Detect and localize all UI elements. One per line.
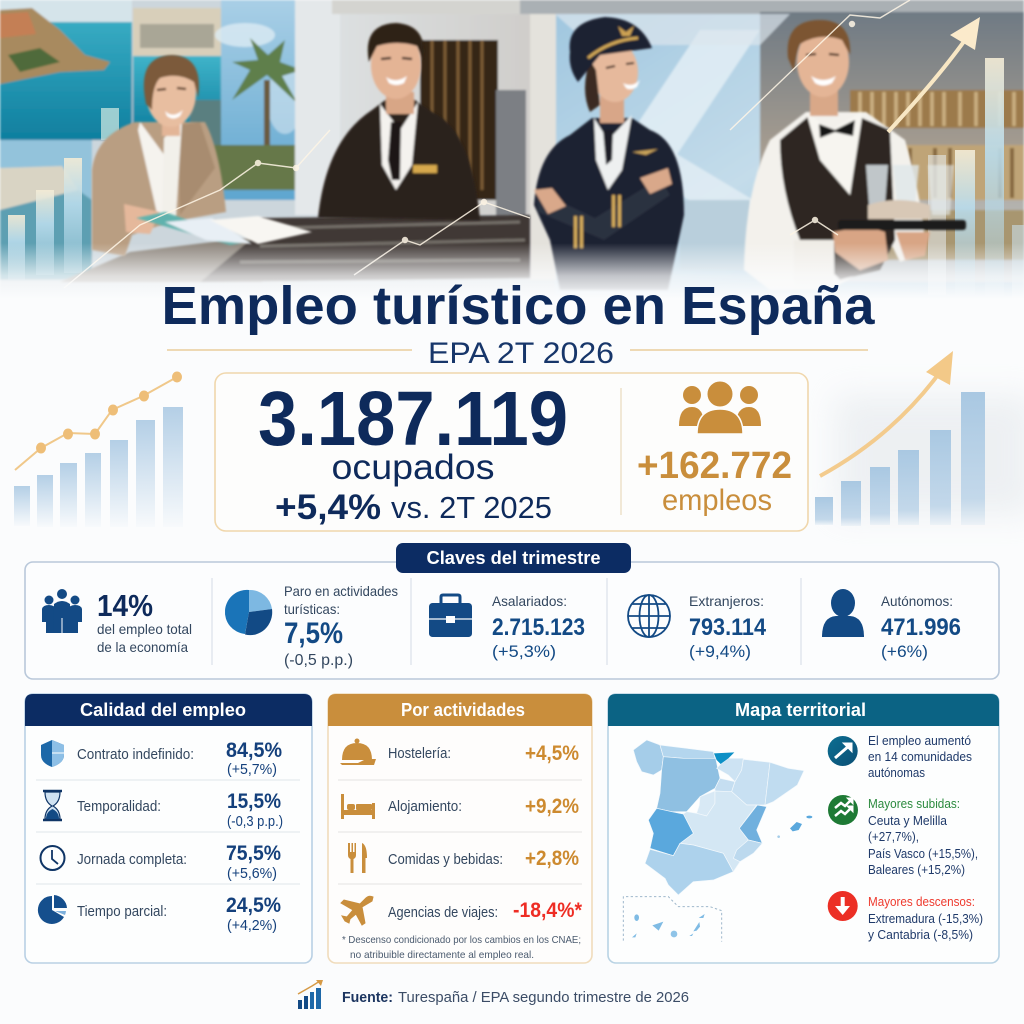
- row: hosteleria: Hostelería:: [388, 745, 451, 762]
- row: hosteleria: [340, 738, 579, 765]
- hero counter desk: [60, 215, 530, 282]
- hero photo collage: tourism workers: [0, 0, 1024, 309]
- kpi: self-employed: (+6%): [881, 642, 928, 661]
- growth arrow in hero: [888, 17, 980, 132]
- face features: [806, 54, 839, 55]
- panel: mapa territorial: [608, 694, 999, 963]
- footer source: Fuente:: [342, 989, 393, 1006]
- kpi: share of economy: 14%: [97, 588, 153, 623]
- kpi: foreigners: [628, 593, 767, 661]
- panel header: Por actividades: [401, 700, 525, 720]
- row: jornada completa: (+5,6%): [227, 865, 277, 882]
- panel: claves del trimestre: [25, 543, 999, 679]
- kpi: foreigners: (+9,4%): [689, 642, 751, 661]
- hero line chart overlay: [64, 0, 910, 288]
- row: contrato indefinido: [41, 739, 282, 778]
- row: tiempo parcial: Tiempo parcial:: [77, 903, 167, 920]
- face features: [157, 88, 186, 90]
- row: comidas y bebidas: +2,8%: [525, 847, 579, 870]
- kpi: employees: 2.715.123: [492, 614, 585, 641]
- kpi: unemployment: turísticas:: [284, 601, 340, 617]
- note: rises in 14 communities: autónomas: [868, 765, 925, 780]
- note: largest rises: País Vasco (+15,5%),: [868, 846, 978, 861]
- row: comidas y bebidas: [348, 843, 579, 873]
- footnote: no atribuible directamente al empleo real.: [350, 949, 534, 961]
- kpi: share of economy: del empleo total: [97, 621, 192, 637]
- note: rises in 14 communities: El empleo aumentó: [868, 733, 971, 748]
- kpi: share of economy: [42, 588, 192, 655]
- face features: [381, 58, 412, 59]
- row: tiempo parcial: [38, 894, 281, 934]
- kpi: unemployment: (-0,5 p.p.): [284, 652, 353, 669]
- kpi: employees: Asalariados:: [492, 593, 567, 609]
- footer source: Turespaña / EPA segundo trimestre de 2026: [398, 989, 689, 1006]
- kpi: employees: [429, 593, 585, 661]
- panel header: [328, 694, 592, 726]
- row: agencias de viajes: Agencias de viajes:: [388, 904, 498, 921]
- note: largest falls: Mayores descensos:: [868, 894, 975, 909]
- panel header: Mapa territorial: [735, 700, 866, 720]
- person: receptionist woman: [92, 55, 226, 256]
- kpi: share of economy: de la economía: [97, 639, 188, 655]
- label empleos: empleos: [662, 484, 772, 517]
- kpi: unemployment: 7,5%: [284, 617, 343, 650]
- panel header: Calidad del empleo: [80, 700, 246, 720]
- row: alojamiento: Alojamiento:: [388, 798, 462, 815]
- row: jornada completa: Jornada completa:: [77, 851, 187, 868]
- right faded interior backdrop: [835, 395, 1024, 515]
- left bar and line chart decoration: [14, 372, 183, 527]
- note: largest rises: Mayores subidas:: [868, 796, 960, 811]
- note: largest rises: Baleares (+15,2%): [868, 862, 965, 877]
- person: waiter with tray: [744, 20, 966, 290]
- headline panel: [215, 373, 808, 531]
- kpi: self-employed: 471.996: [881, 614, 961, 641]
- kpi: self-employed: Autónomos:: [881, 593, 953, 609]
- kpi: foreigners: 793.114: [689, 614, 767, 641]
- row: alojamiento: [341, 794, 579, 819]
- panel header: [25, 694, 312, 726]
- choropleth map of Spain: [623, 740, 812, 942]
- icon: group of people: [679, 381, 761, 434]
- person: airline pilot woman: [534, 17, 684, 290]
- person: concierge man in suit: [318, 23, 480, 220]
- panel header: [608, 694, 999, 726]
- row: jornada completa: 75,5%: [226, 842, 281, 865]
- jobs gained: +162.772: [637, 445, 792, 487]
- hero translucent bar chart overlay: [8, 58, 1024, 300]
- brochures in hand: [136, 212, 312, 245]
- row: temporalidad: Temporalidad:: [77, 798, 161, 815]
- pill heading: Claves del trimestre: [426, 547, 600, 568]
- note: largest rises: [828, 795, 978, 877]
- row: temporalidad: (-0,3 p.p.): [227, 813, 283, 830]
- row: comidas y bebidas: Comidas y bebidas:: [388, 851, 503, 868]
- row: agencias de viajes: [341, 896, 583, 925]
- row: hosteleria: +4,5%: [525, 742, 579, 765]
- kpi: foreigners: Extranjeros:: [689, 593, 764, 609]
- kpi: employees: (+5,3%): [492, 642, 556, 661]
- footnote: [342, 934, 581, 961]
- kpi: unemployment: Paro en actividades: [284, 583, 398, 599]
- right bar chart with gold arrow: [815, 351, 985, 526]
- row: tiempo parcial: (+4,2%): [227, 917, 277, 934]
- subtitle with rules: EPA 2T 2026: [428, 337, 614, 370]
- title: Empleo turístico en España: [162, 276, 875, 336]
- row: contrato indefinido: Contrato indefinido:: [77, 746, 194, 763]
- label ocupados: ocupados: [332, 448, 494, 487]
- kpi: self-employed: [822, 589, 961, 661]
- row: alojamiento: +9,2%: [525, 795, 579, 818]
- footer source: [298, 980, 689, 1009]
- note: rises in 14 communities: en 14 comunidades: [868, 749, 972, 764]
- row: temporalidad: [43, 790, 283, 830]
- panel: por actividades: [328, 694, 592, 963]
- hero fade to white: [0, 243, 1024, 309]
- note: largest falls: [828, 891, 983, 942]
- row: contrato indefinido: 84,5%: [226, 739, 282, 762]
- row: agencias de viajes: -18,4%*: [513, 899, 583, 922]
- face features: [606, 63, 634, 68]
- row: contrato indefinido: (+5,7%): [227, 761, 277, 778]
- pill heading: [396, 543, 631, 573]
- panel: calidad del empleo: [25, 694, 312, 963]
- row: temporalidad: 15,5%: [227, 790, 281, 813]
- note: largest rises: (+27,7%),: [868, 829, 919, 844]
- row: tiempo parcial: 24,5%: [226, 894, 281, 917]
- icon: mini bar chart: [298, 980, 323, 1009]
- hero background scene: [0, 0, 1024, 300]
- yearly change: +5,4%: [275, 488, 381, 527]
- note: largest rises: Ceuta y Melilla: [868, 813, 948, 828]
- footnote: * Descenso condicionado por los cambios en los CNAE;: [342, 934, 581, 946]
- row: jornada completa: [40, 842, 281, 882]
- total employed number: 3.187.119: [258, 376, 568, 462]
- comparison: vs. 2T 2025: [391, 490, 552, 525]
- note: rises in 14 communities: [828, 733, 972, 780]
- kpi: unemployment: [225, 583, 398, 669]
- note: largest falls: Extremadura (-15,3%): [868, 911, 983, 926]
- note: largest falls: y Cantabria (-8,5%): [868, 927, 973, 942]
